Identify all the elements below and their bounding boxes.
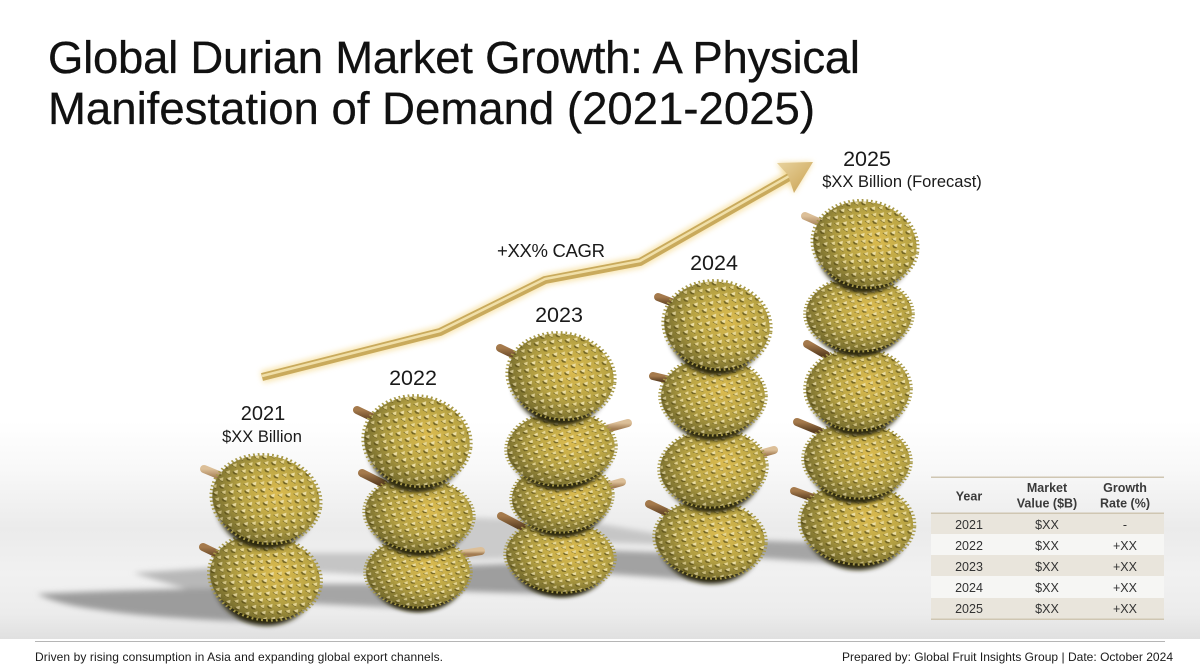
- column: 2022: [357, 366, 481, 612]
- table rows: +XX: [1113, 560, 1138, 574]
- year label 2025: 2025: [843, 147, 891, 171]
- durian stack 2022: [357, 389, 481, 612]
- column: 2025: [794, 147, 982, 574]
- year label 2024: 2024: [690, 251, 738, 275]
- title: Global Durian Market Growth: A Physical: [48, 32, 860, 83]
- durian stack 2021: [202, 447, 327, 635]
- table rows: -: [1123, 518, 1127, 532]
- durian stack 2025: [794, 193, 924, 574]
- durian stack 2024: [649, 274, 776, 588]
- column: 2023: [500, 303, 628, 601]
- table header: [956, 481, 1150, 510]
- value label 2025: $XX Billion (Forecast): [822, 173, 982, 191]
- table rows: 2023: [955, 560, 983, 574]
- table rows: +XX: [1113, 581, 1138, 595]
- footer note: Driven by rising consumption in Asia and expanding global export channels.: [35, 650, 443, 664]
- data table: [931, 476, 1164, 620]
- table rows: +XX: [1113, 602, 1138, 616]
- title: Manifestation of Demand (2021-2025): [48, 83, 815, 134]
- table rows: $XX: [1035, 560, 1059, 574]
- table header: Year: [956, 490, 982, 504]
- value label 2021: $XX Billion: [222, 428, 302, 446]
- table rows: 2025: [955, 602, 983, 616]
- growth arrow: [262, 162, 813, 377]
- footer credit: Prepared by: Global Fruit Insights Group | Date: October 2024: [842, 650, 1173, 664]
- table rows: +XX: [1113, 539, 1138, 553]
- table header: Rate (%): [1100, 496, 1150, 510]
- year label 2022: 2022: [389, 366, 437, 390]
- table rows: $XX: [1035, 581, 1059, 595]
- CAGR label: +XX% CAGR: [497, 240, 605, 261]
- table header: Market: [1027, 481, 1068, 495]
- table header: Value ($B): [1017, 496, 1077, 510]
- table rows: 2024: [955, 581, 983, 595]
- durian stack 2023: [500, 326, 628, 601]
- table rows: $XX: [1035, 602, 1059, 616]
- table rows: 2022: [955, 539, 983, 553]
- table rows: $XX: [1035, 518, 1059, 532]
- table rows: [955, 518, 1138, 616]
- table header: Growth: [1103, 481, 1147, 495]
- column: 2024: [649, 251, 776, 588]
- year label 2021: 2021: [241, 403, 285, 425]
- table rows: 2021: [955, 518, 983, 532]
- footer: [35, 641, 1173, 664]
- floor shadows: [37, 517, 848, 622]
- year label 2023: 2023: [535, 303, 583, 327]
- column: 2021: [202, 403, 327, 635]
- title: [48, 32, 860, 134]
- table rows: $XX: [1035, 539, 1059, 553]
